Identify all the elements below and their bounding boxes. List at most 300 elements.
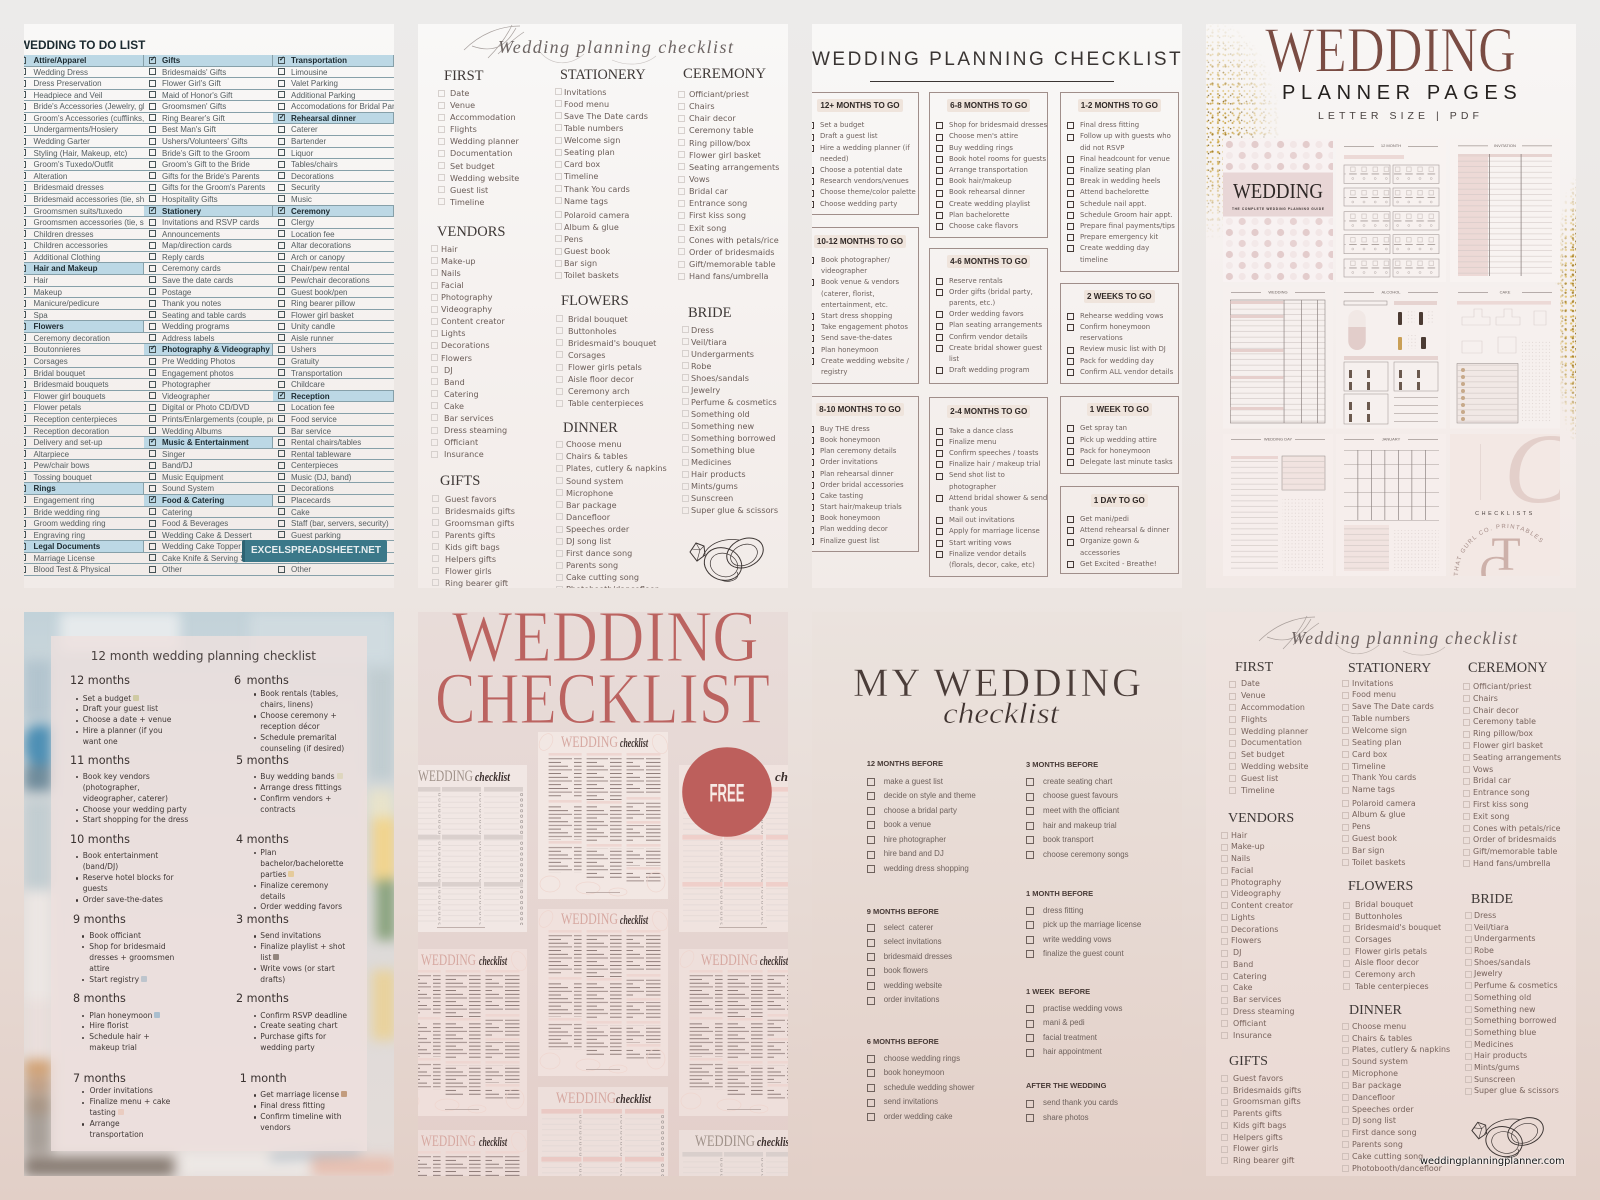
heading: 1 month: 1 month bbox=[240, 1072, 287, 1085]
spreadsheet column 1 bbox=[24, 55, 144, 576]
list: 1 week before bbox=[1026, 1002, 1122, 1060]
spreadsheet column 2: Music Equipment bbox=[162, 473, 223, 482]
list: vendors: Decorations bbox=[441, 340, 490, 350]
list: 9 months: dresses + groomsmen bbox=[89, 953, 174, 962]
script: checklist: checklist bbox=[943, 697, 1060, 730]
banner: excelspreadsheet.net bbox=[242, 540, 387, 562]
list: dinner: Chairs & tables bbox=[1352, 1034, 1412, 1043]
list: bride: Mints/gums bbox=[1474, 1063, 1520, 1072]
list: 8 months: makeup trial bbox=[89, 1043, 137, 1052]
spreadsheet column 3: Centerpieces bbox=[291, 461, 338, 470]
list: 1-2 months: Final headcount for venue bbox=[1080, 155, 1170, 163]
spreadsheet column 2: Stationery bbox=[162, 207, 201, 216]
list: first: Venue bbox=[450, 100, 475, 110]
list: bride: Veil/tiara bbox=[691, 337, 727, 347]
list: vendors: Facial bbox=[441, 280, 464, 290]
spreadsheet column 3: Security bbox=[291, 183, 320, 192]
list: bride: Mints/gums bbox=[691, 481, 738, 491]
list: 8-10 months: Finalize guest list bbox=[820, 537, 879, 545]
list: 1-2 months: timeline bbox=[1080, 256, 1108, 264]
heading: 6-8 months to go: 6-8 MONTHS TO GO bbox=[950, 101, 1027, 110]
list: 1-2 months: Follow up with guests who bbox=[1080, 132, 1171, 140]
list: 12+ months: Set a budget bbox=[820, 121, 864, 129]
list: 8-10 months: Order bridal accessories bbox=[820, 481, 904, 489]
list: first: Wedding planner bbox=[450, 136, 519, 146]
thumbnail: alcohol calculator: ALCOHOL bbox=[1381, 289, 1401, 294]
spreadsheet column 1: Flowers bbox=[34, 322, 64, 331]
thumbnail: left text checklist: WEDDING bbox=[421, 952, 476, 969]
spreadsheet column 2: Wedding Cake Topper bbox=[162, 542, 241, 551]
spreadsheet column 3: Unity candle bbox=[291, 322, 335, 331]
list: ceremony: Vows bbox=[1473, 765, 1493, 774]
list: ceremony: Cones with petals/rice bbox=[689, 235, 779, 245]
list: 9 months: Book officiant bbox=[89, 931, 141, 940]
list: dinner: Cake cutting song bbox=[566, 572, 639, 582]
list: bride: Sunscreen bbox=[691, 493, 733, 503]
list: 8 months: Hire florist bbox=[89, 1021, 129, 1030]
heading: 12 months before: 12 MONTHS BEFORE bbox=[867, 759, 943, 768]
spreadsheet column 3: Other bbox=[291, 565, 311, 574]
spreadsheet column 3: Staff (bar, servers, security) bbox=[291, 519, 389, 528]
spreadsheet column 3 bbox=[273, 55, 394, 576]
list: flowers: Bridesmaid's bouquet bbox=[1355, 923, 1441, 932]
thumbnail: invitation: INVITATION bbox=[1494, 142, 1516, 148]
list: 6 months: counseling (if desired) bbox=[260, 744, 344, 753]
list: 1 month before: finalize the guest count bbox=[1043, 949, 1124, 958]
list: dinner: Microphone bbox=[1352, 1069, 1398, 1078]
heading: 1 week before: 1 WEEK BEFORE bbox=[1026, 987, 1090, 996]
list: vendors: Photography bbox=[1231, 878, 1281, 887]
card: 10-12 months bbox=[800, 227, 919, 384]
list: 4 months: details bbox=[260, 892, 285, 901]
list: 1-2 months: Prepare final payments/tips bbox=[1080, 222, 1175, 230]
list: 12+ months: Hire a wedding planner (if bbox=[820, 144, 910, 152]
list: 10 months: Order save-the-dates bbox=[83, 895, 163, 904]
list: 6 months before: send invitations bbox=[884, 1097, 938, 1106]
panel: wedding checklist free bbox=[418, 612, 788, 1176]
list: ceremony: Entrance song bbox=[689, 198, 747, 208]
list: 10-12 months: Book venue & vendors bbox=[821, 278, 899, 286]
list: 12 months before: hire photographer bbox=[884, 835, 946, 844]
spreadsheet column 2: Cake Knife & Serving Set bbox=[162, 554, 252, 563]
spreadsheet column 3: Rental chairs/tables bbox=[291, 438, 361, 447]
spreadsheet column 3: Guest book/pen bbox=[291, 288, 347, 297]
title underline bbox=[870, 81, 1114, 82]
list: 8-10 months: Cake tasting bbox=[820, 492, 863, 500]
list: vendors: Flowers bbox=[1231, 936, 1261, 945]
list: 8 months bbox=[82, 1010, 160, 1054]
list: vendors: Content creator bbox=[441, 316, 505, 326]
list: vendors: Decorations bbox=[1231, 925, 1278, 934]
spreadsheet column 2: Groom's Gift to the Bride bbox=[162, 160, 250, 169]
list: 8-10 months bbox=[812, 425, 904, 545]
list: 4-6 months: Order gifts (bridal party, bbox=[949, 288, 1033, 296]
list: bride: Something borrowed bbox=[1474, 1016, 1556, 1025]
list: ceremony: Officiant/priest bbox=[689, 89, 749, 99]
thumbnail: right lower lined checklist: WEDDING bbox=[695, 1133, 755, 1150]
spreadsheet column 3: Limousine bbox=[291, 68, 327, 77]
list: stationery: Welcome sign bbox=[1352, 726, 1407, 735]
thumbnail: right text checklist bbox=[679, 949, 809, 1116]
spreadsheet column 2: Music & Entertainment bbox=[162, 438, 249, 447]
list: flowers bbox=[1343, 899, 1441, 992]
title: 12 month wedding planning checklist: 12 month wedding planning checklist bbox=[91, 649, 316, 663]
list: 3 months before: choose guest favours bbox=[1043, 791, 1118, 800]
thumbnail: center lined checklist lower: checklist bbox=[616, 1091, 651, 1106]
panel: wedding planning checklist script tinted bbox=[1206, 612, 1576, 1176]
list: 6 months before: book honeymoon bbox=[884, 1068, 944, 1077]
spreadsheet column 3: Bartender bbox=[291, 137, 326, 146]
list: 6 months: Schedule premarital bbox=[260, 733, 337, 742]
list: first: Wedding planner bbox=[1241, 727, 1308, 736]
list: after the wedding: share photos bbox=[1043, 1113, 1089, 1122]
list: 3 months bbox=[254, 931, 345, 986]
list: 9 months: Shop for bridesmaid bbox=[89, 942, 166, 951]
list: first: Wedding website bbox=[1241, 762, 1308, 771]
list: vendors: Videography bbox=[1231, 889, 1281, 898]
spreadsheet column 3: Rental tableware bbox=[291, 450, 351, 459]
list: vendors bbox=[1221, 830, 1295, 1041]
list: ceremony: Vows bbox=[689, 174, 710, 184]
heading: 10 months: 10 months bbox=[70, 833, 130, 846]
list: 2 weeks: Confirm honeymoon bbox=[1080, 323, 1150, 331]
list: 2 months: Purchase gifts for bbox=[260, 1032, 326, 1041]
list: vendors: Cake bbox=[1233, 983, 1252, 992]
list: bride: Super glue & scissors bbox=[691, 505, 778, 515]
spreadsheet column 3: Reception bbox=[291, 392, 330, 401]
list: 10-12 months: entertainment, etc. bbox=[821, 301, 888, 309]
list: 12+ months: Draft a guest list bbox=[820, 132, 878, 140]
heading: 1 week to go: 1 WEEK TO GO bbox=[1090, 404, 1149, 414]
list: 2-4 months: thank yous bbox=[949, 505, 987, 513]
list: bride: Jewelry bbox=[691, 385, 720, 395]
card: 8-10 months bbox=[800, 396, 919, 552]
list: ceremony: First kiss song bbox=[689, 210, 746, 220]
list: stationery: Welcome sign bbox=[564, 135, 620, 145]
spreadsheet column 2 bbox=[144, 55, 273, 576]
spreadsheet column 1: Reception centerpieces bbox=[34, 415, 117, 424]
heading: after the wedding: AFTER THE WEDDING bbox=[1026, 1081, 1106, 1090]
spreadsheet column 1: Reception decoration bbox=[34, 426, 109, 436]
list: 1 month: vendors bbox=[260, 1123, 291, 1132]
card: 1 week bbox=[1060, 396, 1179, 474]
list: 6 months bbox=[254, 689, 344, 755]
thumbnail: alcohol calculator bbox=[1344, 289, 1438, 424]
spreadsheet column 3: Gratuity bbox=[291, 357, 319, 366]
list: 1-2 months: Schedule nail appt. bbox=[1080, 200, 1146, 208]
spreadsheet column 1: Tossing bouquet bbox=[34, 473, 92, 482]
list: first: Timeline bbox=[450, 197, 484, 207]
list: ceremony: Ring pillow/box bbox=[1473, 729, 1533, 738]
spreadsheet column 1: Wedding Dress bbox=[34, 68, 88, 77]
spreadsheet column 2: Postage bbox=[162, 288, 191, 297]
list: 10-12 months bbox=[812, 256, 909, 376]
list: bride: Hair products bbox=[691, 469, 746, 479]
list: vendors: Bar services bbox=[444, 413, 494, 423]
list: 2-4 months: Take a dance class bbox=[949, 427, 1013, 435]
spreadsheet column 1: Dress Preservation bbox=[34, 79, 102, 88]
spreadsheet column 2: Announcements bbox=[162, 230, 220, 239]
thumbnail: left lower text checklist: checklist bbox=[479, 1134, 507, 1149]
list: stationery bbox=[1342, 678, 1434, 796]
list: 3 months before bbox=[1026, 775, 1129, 862]
list: 9 months before: book flowers bbox=[884, 966, 928, 975]
list: 2 months: Create seating chart bbox=[260, 1021, 338, 1030]
list: 6-8 months: Book rehearsal dinner bbox=[949, 188, 1025, 196]
list: first: Wedding website bbox=[450, 173, 519, 183]
list: gifts: Kids gift bags bbox=[445, 542, 500, 552]
spreadsheet column 3: Transportation bbox=[291, 56, 347, 65]
list: bride: Undergarments bbox=[691, 349, 754, 359]
list: ceremony: Exit song bbox=[1473, 812, 1509, 821]
list: 2-4 months bbox=[936, 427, 1047, 569]
panel: 12 month wedding planning checklist photo bbox=[24, 612, 394, 1176]
list: flowers: Ceremony arch bbox=[1355, 970, 1415, 979]
thumbnail: center text checklist top: checklist bbox=[620, 735, 648, 750]
list: dinner: Bar package bbox=[566, 500, 617, 510]
list: stationery extras: Pens bbox=[564, 234, 583, 244]
heading: 11 months: 11 months bbox=[70, 754, 130, 767]
spreadsheet column 2: Wedding programs bbox=[162, 322, 229, 331]
list: 8-10 months: Plan rehearsal dinner bbox=[820, 470, 893, 478]
spreadsheet column 3: Clergy bbox=[291, 218, 314, 227]
list: ceremony: Bridal car bbox=[1473, 776, 1511, 785]
list: ceremony: Chair decor bbox=[689, 113, 736, 123]
thumbnail: left lined checklist bbox=[397, 765, 527, 932]
list: 8 months: Schedule hair + bbox=[89, 1032, 150, 1041]
list: 12 months before: book a venue bbox=[884, 820, 931, 829]
list: 1 day: Get Excited - Breathe! bbox=[1080, 560, 1157, 568]
list: 12 months before bbox=[867, 774, 976, 876]
heading: 1-2 months to go: 1-2 MONTHS TO GO bbox=[1081, 101, 1158, 110]
list: 9 months before bbox=[867, 921, 952, 1008]
list: 9 months before: select invitations bbox=[884, 937, 942, 946]
list: 11 months bbox=[76, 772, 188, 826]
spreadsheet column 1: Groom wedding ring bbox=[34, 519, 106, 528]
list: dinner: Chairs & tables bbox=[566, 451, 628, 461]
title: wedding planning checklist: WEDDING PLANNING CHECKLIST bbox=[812, 49, 1182, 70]
list: 1-2 months bbox=[1067, 121, 1175, 264]
list: 12 months: Hire a planner (if you bbox=[83, 726, 163, 735]
list: 9 months before: select caterer bbox=[884, 923, 933, 932]
spreadsheet column 3: Valet Parking bbox=[291, 79, 338, 88]
spreadsheet column 2: Bridesmaids' Gifts bbox=[162, 68, 226, 77]
panel: wedding planning checklist script bbox=[418, 24, 788, 588]
list: vendors: Content creator bbox=[1231, 901, 1293, 910]
list: bride: Sunscreen bbox=[1474, 1075, 1515, 1084]
spreadsheet column 2: Wedding Cake & Dessert bbox=[162, 531, 252, 540]
spreadsheet column 3: Arch or canopy bbox=[291, 253, 345, 262]
thumbnail: cover bbox=[1223, 139, 1333, 280]
list: after the wedding: send thank you cards bbox=[1043, 1098, 1118, 1107]
list: stationery extras: Toilet baskets bbox=[1352, 858, 1405, 867]
list: vendors: DJ bbox=[1233, 948, 1241, 957]
list: stationery: Name tags bbox=[1352, 785, 1395, 794]
list: vendors: Make-up bbox=[441, 256, 476, 266]
spreadsheet column 2: Best Man's Gift bbox=[162, 125, 216, 134]
list: stationery: Save The Date cards bbox=[564, 111, 648, 121]
list: 3 months before: meet with the officiant bbox=[1043, 806, 1119, 815]
heading: 5 months: 5 months bbox=[236, 754, 289, 767]
thumbnail: calendar bbox=[1336, 434, 1446, 576]
thumbnail: cake bbox=[1450, 287, 1560, 429]
list: 11 months: Book key vendors bbox=[83, 772, 150, 781]
list: 2-4 months: Finalize hair / makeup trial bbox=[949, 460, 1040, 468]
title: script wedding planning checklist: Wedding planning checklist bbox=[1291, 628, 1518, 648]
list: 2-4 months: Start writing vows bbox=[949, 539, 1011, 547]
list: ceremony: Ceremony table bbox=[1473, 717, 1536, 726]
list: 11 months: Start shopping for the dress bbox=[83, 815, 188, 824]
list: dinner: DJ song list bbox=[566, 536, 611, 546]
list: 1 month before bbox=[1026, 904, 1141, 962]
panel: excel wedding to do list bbox=[24, 24, 394, 588]
list: vendors: Hair bbox=[1231, 830, 1247, 840]
list: 10-12 months: Start dress shopping bbox=[821, 312, 892, 320]
list: 1 week before: mani & pedi bbox=[1043, 1018, 1085, 1027]
list: dinner bbox=[1342, 1021, 1450, 1175]
thumbnail: right lower lined checklist bbox=[679, 1130, 809, 1176]
list: bride: Something new bbox=[691, 421, 754, 431]
list: stationery: Timeline bbox=[564, 171, 598, 181]
spreadsheet column 3: Food service bbox=[291, 415, 337, 424]
list: flowers: Flower girls petals bbox=[1355, 947, 1427, 956]
list: 1-2 months: Final dress fitting bbox=[1080, 121, 1139, 129]
heading: 6 months before: 6 MONTHS BEFORE bbox=[867, 1037, 939, 1046]
heading: 4-6 months to go: 4-6 MONTHS TO GO bbox=[950, 257, 1027, 266]
icon: wedding rings bbox=[1469, 1114, 1547, 1160]
list: flowers: Aisle floor decor bbox=[568, 374, 634, 384]
spreadsheet column 2: Ushers/Volunteers' Gifts bbox=[162, 137, 248, 146]
list: first: Guest list bbox=[450, 185, 488, 195]
heading: 2 weeks to go: 2 WEEKS TO GO bbox=[1087, 292, 1152, 301]
list: 3 months: Send invitations bbox=[260, 931, 321, 940]
list: first: Documentation bbox=[450, 148, 512, 158]
heading: 12+ months to go: 12+ MONTHS TO GO bbox=[820, 101, 900, 110]
spreadsheet column 3: Decorations bbox=[291, 172, 334, 181]
spreadsheet column 3: Aisle runner bbox=[291, 334, 334, 343]
heading: gifts: GIFTS bbox=[1229, 1054, 1268, 1069]
list: vendors: Insurance bbox=[444, 449, 484, 459]
list: bride: Shoes/sandals bbox=[1474, 958, 1531, 967]
subtitle: planner pages: PLANNER PAGES bbox=[1282, 82, 1522, 104]
list: 6 months: reception décor bbox=[260, 722, 320, 731]
list: 6 months: Book rentals (tables, bbox=[260, 689, 338, 698]
heading: 4 months: 4 months bbox=[236, 833, 289, 846]
list: first: Flights bbox=[1241, 715, 1267, 724]
list: 8-10 months: Plan ceremony details bbox=[820, 447, 896, 455]
thumbnail: center text checklist top bbox=[538, 732, 668, 899]
list: 5 months: contracts bbox=[260, 804, 296, 814]
list: ceremony: Flower girl basket bbox=[1473, 741, 1543, 750]
list: bride bbox=[1465, 910, 1559, 1097]
thumbnail: center text checklist middle: WEDDING bbox=[561, 911, 618, 928]
list: ceremony: Hand fans/umbrella bbox=[689, 271, 769, 281]
list: 6-8 months: Arrange transportation bbox=[949, 166, 1028, 174]
list: first: Date bbox=[450, 88, 469, 98]
thumbnail: left text checklist bbox=[397, 949, 527, 1116]
list: vendors: Dress steaming bbox=[444, 425, 507, 435]
list: 11 months: videographer, caterer) bbox=[83, 794, 168, 803]
card: 12+ months bbox=[800, 92, 919, 215]
list: vendors: Lights bbox=[441, 328, 465, 338]
list: 1 month bbox=[254, 1090, 347, 1134]
list: 5 months bbox=[254, 772, 343, 815]
list: stationery: Food menu bbox=[564, 99, 609, 109]
panel: wedding planner pages bbox=[1206, 24, 1576, 588]
spreadsheet column 2: Thank you notes bbox=[162, 299, 221, 308]
list: bride: Shoes/sandals bbox=[691, 373, 749, 383]
spreadsheet column 2: Bride's Gift to the Groom bbox=[162, 149, 250, 158]
list: 10-12 months: Create wedding website / bbox=[821, 357, 909, 365]
thumbnail: center text checklist middle: checklist bbox=[620, 912, 648, 927]
gold glitter left bbox=[1206, 26, 1278, 236]
thumbnail: checklists logo: CHECKLISTS bbox=[1475, 511, 1535, 517]
heading: 9 months: 9 months bbox=[73, 913, 126, 926]
list: first: Accommodation bbox=[450, 112, 516, 122]
list: vendors: Photography bbox=[441, 292, 493, 302]
list: 1-2 months: Attend bachelorette bbox=[1080, 188, 1149, 196]
list: ceremony: Ring pillow/box bbox=[689, 138, 751, 148]
list: dinner: Photobooth/dancefloor bbox=[1352, 1164, 1442, 1173]
list: first: Venue bbox=[1241, 691, 1266, 700]
list: vendors: Make-up bbox=[1231, 842, 1265, 851]
list: stationery: Card box bbox=[1352, 750, 1387, 759]
spreadsheet column 2: Food & Beverages bbox=[162, 519, 228, 528]
list: gifts: Guest favors bbox=[445, 494, 496, 504]
list: 1 month before: pick up the marriage license bbox=[1043, 920, 1141, 929]
spreadsheet column 1: Alteration bbox=[34, 172, 67, 181]
list: gifts: Flower girls bbox=[445, 566, 492, 576]
list: flowers: Bridesmaid's bouquet bbox=[568, 338, 656, 348]
list: ceremony: Bridal car bbox=[689, 186, 728, 196]
list: bride: Something new bbox=[1474, 1004, 1536, 1014]
spreadsheet column 1: Flower petals bbox=[34, 403, 81, 412]
card: 2-4 months bbox=[929, 397, 1048, 577]
list: 12 months bbox=[76, 694, 171, 748]
list: 4-6 months: list bbox=[949, 355, 959, 363]
list: 2-4 months: Finalize vendor details bbox=[949, 550, 1026, 558]
list: 12 months before: wedding dress shopping bbox=[884, 864, 969, 873]
spreadsheet column 1: Manicure/pedicure bbox=[34, 299, 99, 308]
list: 6 months before bbox=[867, 1052, 974, 1124]
list: vendors: Officiant bbox=[444, 437, 478, 447]
spreadsheet column 3: Rehearsal dinner bbox=[291, 114, 356, 123]
spreadsheet column 1: Engraving ring bbox=[34, 531, 85, 540]
list: flowers: Corsages bbox=[1355, 935, 1392, 944]
thumbnail: left lower text checklist bbox=[397, 1130, 527, 1176]
list: 1 day bbox=[1067, 515, 1170, 568]
heading: 2 months: 2 months bbox=[236, 992, 289, 1005]
list: 8 months: Plan honeymoon bbox=[89, 1010, 152, 1020]
spreadsheet column 2: Groomsmen' Gifts bbox=[162, 102, 226, 111]
list: bride: Undergarments bbox=[1474, 934, 1535, 943]
list: bride: Something blue bbox=[691, 445, 755, 455]
list: 7 months: Order invitations bbox=[90, 1086, 153, 1095]
spreadsheet column 3: Bar service bbox=[291, 426, 331, 436]
list: ceremony: Flower girl basket bbox=[689, 150, 761, 160]
list: 6-8 months: Choose men's attire bbox=[949, 132, 1018, 140]
list: vendors: Nails bbox=[1231, 854, 1250, 863]
list: 2 months: Confirm RSVP deadline bbox=[260, 1010, 347, 1020]
list: 2 weeks: Pack for wedding day bbox=[1080, 357, 1154, 365]
list: 10 months: guests bbox=[83, 884, 108, 893]
list: stationery: Table numbers bbox=[564, 123, 623, 133]
spreadsheet column 3: Pew/chair decorations bbox=[291, 276, 370, 285]
list: bride: Super glue & scissors bbox=[1474, 1086, 1559, 1095]
list: 10-12 months: registry bbox=[821, 368, 847, 376]
list: stationery extras: Polaroid camera bbox=[1352, 799, 1416, 808]
list: 1-2 months: Schedule Groom hair appt. bbox=[1080, 211, 1173, 219]
